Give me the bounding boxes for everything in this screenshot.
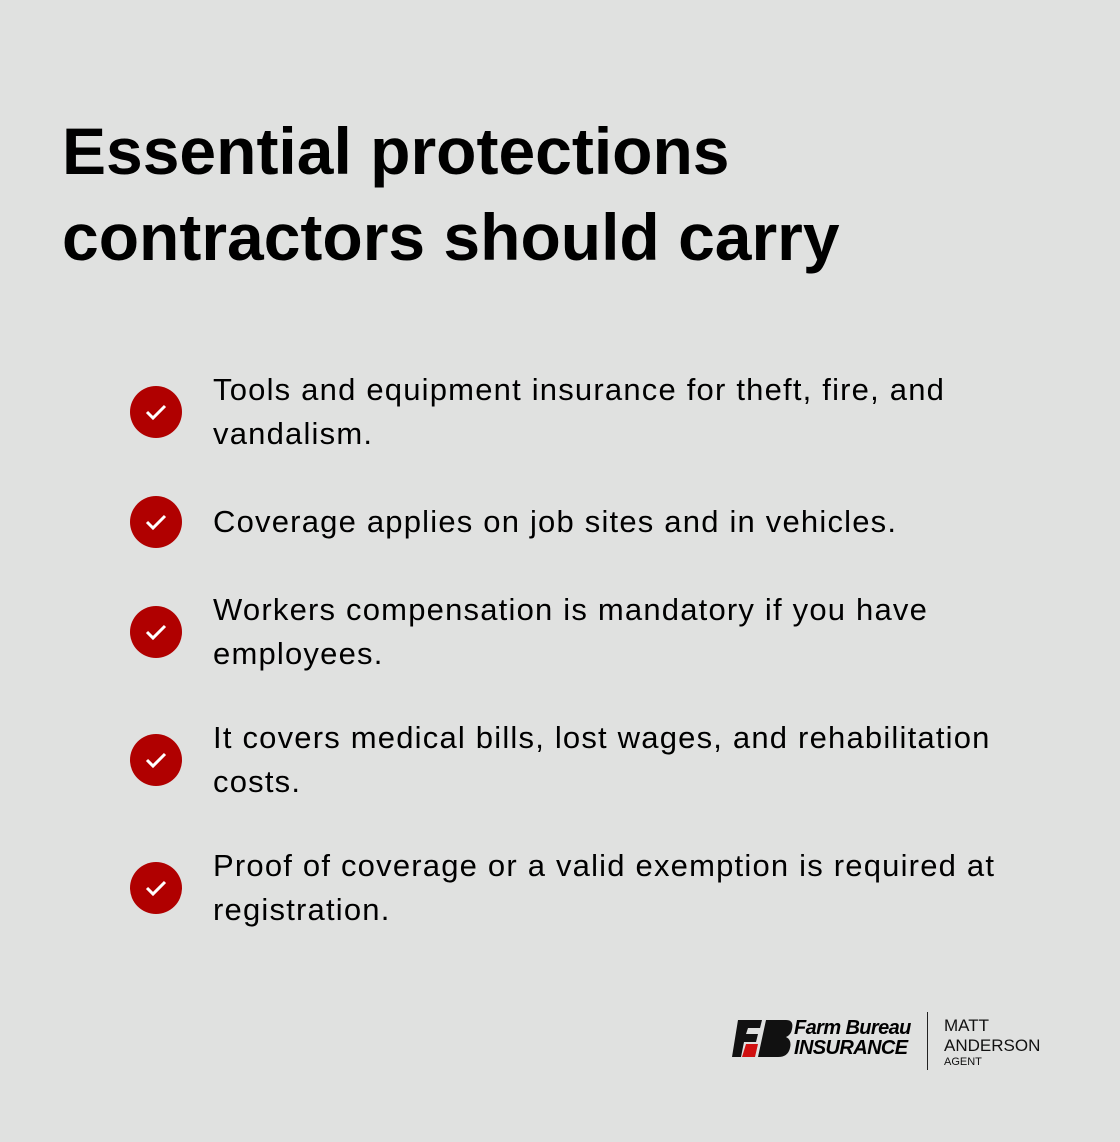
brand text	[794, 1017, 911, 1059]
logo	[732, 1012, 1040, 1070]
item 4	[130, 720, 991, 799]
agent name	[944, 1016, 1040, 1068]
item 1	[130, 372, 945, 451]
icon: check	[130, 862, 182, 914]
agent name: MATT	[944, 1016, 989, 1035]
text 1: Tools and equipment insurance for theft, fire, and vandalism.	[213, 372, 945, 451]
brand text: Farm Bureau	[794, 1017, 911, 1039]
icon: check	[130, 734, 182, 786]
title	[62, 114, 840, 274]
text 3: Workers compensation is mandatory if you have employees.	[213, 592, 928, 671]
brand text: INSURANCE	[794, 1037, 908, 1059]
title: Essential protections	[62, 114, 730, 188]
icon: check	[130, 606, 182, 658]
agent name: AGENT	[944, 1056, 982, 1068]
icon: check	[130, 496, 182, 548]
text 4: It covers medical bills, lost wages, and rehabilitation costs.	[213, 720, 991, 799]
agent name: ANDERSON	[944, 1036, 1040, 1055]
text 5: Proof of coverage or a valid exemption is required at registration.	[213, 848, 995, 927]
icon: FB mark	[732, 1020, 792, 1057]
item 3	[130, 592, 928, 671]
item 5	[130, 848, 995, 927]
icon: check	[130, 386, 182, 438]
title: contractors should carry	[62, 200, 840, 274]
text 2: Coverage applies on job sites and in vehicles.	[213, 504, 897, 539]
item 2	[130, 496, 897, 548]
